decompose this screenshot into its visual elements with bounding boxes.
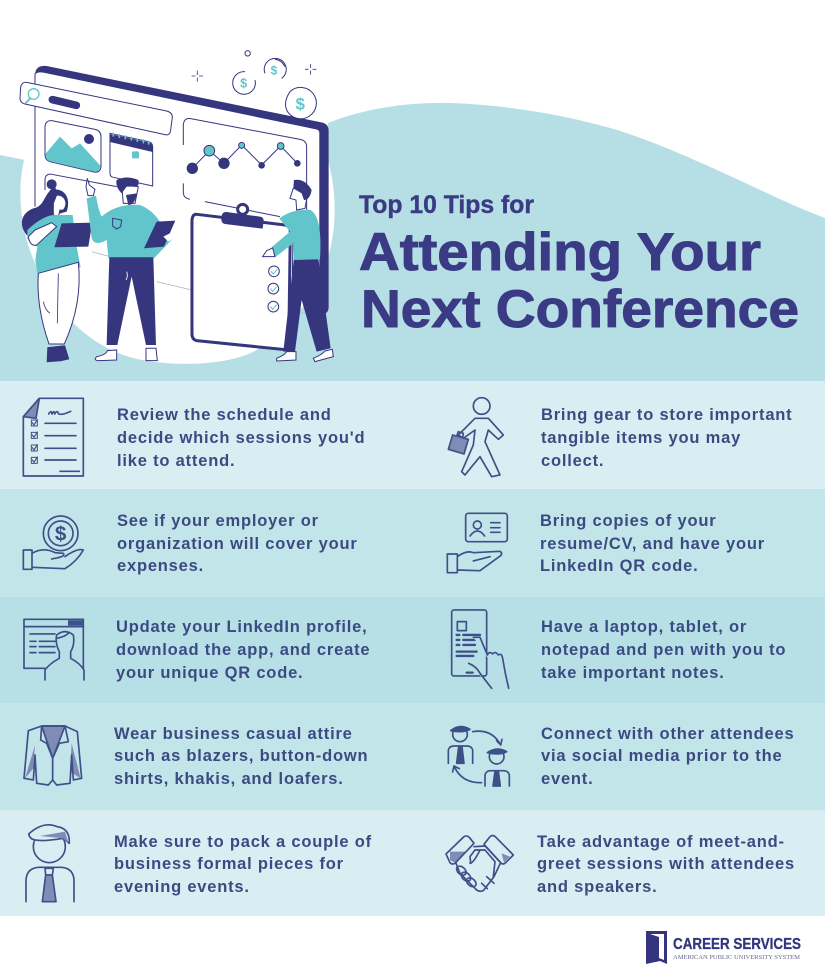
tip 10 text (537, 833, 795, 896)
clipboard with checks (192, 204, 293, 352)
tip 2 text: expenses. (117, 557, 204, 575)
image card (45, 121, 101, 172)
icon: man with tie (26, 825, 74, 902)
tip 8 text: take important notes. (541, 664, 725, 682)
title (359, 191, 799, 339)
tip 5 text: evening events. (114, 878, 250, 896)
logo door icon (646, 931, 667, 964)
tip 4 text: such as blazers, button-down (114, 747, 368, 765)
band 3 (0, 597, 825, 703)
icon: coin over hand: $ (55, 523, 67, 546)
tip 8 text (541, 618, 786, 682)
calendar card (110, 133, 153, 186)
tip 4 text: Wear business casual attire (114, 725, 353, 743)
logo: career services (646, 931, 801, 964)
tip 9 text (541, 725, 794, 788)
title line: Attending Your: Attending Your (359, 223, 761, 282)
title line: Top 10 Tips for: Top 10 Tips for (359, 191, 534, 219)
title line: Next Conference: Next Conference (361, 280, 799, 339)
band 4 (0, 703, 825, 810)
person: man pointing at clipboard (263, 180, 333, 362)
icon: connecting people (448, 727, 509, 786)
line chart panel (183, 118, 307, 217)
band 5 (0, 810, 825, 916)
tip 9 text: Connect with other attendees (541, 725, 794, 743)
icon: coin over hand (23, 516, 83, 569)
tip 5 text: business formal pieces for (114, 855, 344, 873)
tip 6 text: tangible items you may (541, 429, 741, 447)
tip 6 text (541, 406, 792, 470)
dollar coins and sparkles: $ (296, 94, 306, 113)
tip 1 text: like to attend. (117, 452, 235, 470)
icon: checklist document (23, 398, 83, 476)
band 2 (0, 489, 825, 597)
tip 3 text: download the app, and create (116, 641, 370, 659)
dollar coins and sparkles: $ (240, 76, 247, 90)
tip 8 text: Have a laptop, tablet, or (541, 618, 747, 636)
band 1 (0, 381, 825, 489)
tip 1 text: decide which sessions you'd (117, 429, 365, 447)
icon: tablet with hand (452, 610, 509, 688)
tip 10 text: Take advantage of meet-and- (537, 833, 785, 851)
tip 6 text: Bring gear to store important (541, 406, 792, 424)
search bar (20, 82, 172, 135)
tip 5 text: Make sure to pack a couple of (114, 833, 372, 851)
tip 7 text (540, 512, 765, 575)
icon: walking man with briefcase (448, 398, 503, 477)
dollar coins and sparkles: $ (271, 63, 278, 77)
person: man with clipboard (86, 177, 175, 361)
icon: blazer (24, 726, 82, 785)
icon: profile window (24, 619, 84, 680)
logo subtitle: AMERICAN PUBLIC UNIVERSITY SYSTEM (673, 954, 800, 961)
tip 1 text (117, 406, 365, 470)
person: woman with tablet (22, 179, 92, 362)
tip 5 text (114, 833, 372, 896)
tip 6 text: collect. (541, 452, 604, 470)
icon: handshake (446, 835, 513, 891)
tip 3 text: your unique QR code. (116, 664, 303, 682)
tip 9 text: via social media prior to the (541, 747, 782, 765)
illustration: team at dashboard (20, 51, 333, 362)
logo wordmark: CAREER SERVICES (673, 936, 801, 953)
white blob behind illustration (20, 60, 335, 364)
tip 7 text: Bring copies of your (540, 512, 716, 530)
tip 7 text: LinkedIn QR code. (540, 557, 698, 575)
tip 4 text (114, 725, 368, 788)
tip 4 text: shirts, khakis, and loafers. (114, 770, 344, 788)
tip 10 text: and speakers. (537, 878, 657, 896)
background wave (0, 103, 825, 381)
tip 10 text: greet sessions with attendees (537, 855, 795, 873)
lower card outline (45, 174, 117, 190)
tip 3 text: Update your LinkedIn profile, (116, 618, 367, 636)
tip 8 text: notepad and pen with you to (541, 641, 786, 659)
tip 1 text: Review the schedule and (117, 406, 332, 424)
tip 7 text: resume/CV, and have your (540, 535, 765, 553)
tip 9 text: event. (541, 770, 594, 788)
tip 3 text (116, 618, 370, 682)
tip 2 text (117, 512, 358, 575)
tip 2 text: organization will cover your (117, 535, 358, 553)
tip 2 text: See if your employer or (117, 512, 319, 530)
dollar coins and sparkles (192, 51, 316, 119)
dashboard board (35, 66, 329, 314)
icon: ID card over hand (447, 513, 507, 573)
